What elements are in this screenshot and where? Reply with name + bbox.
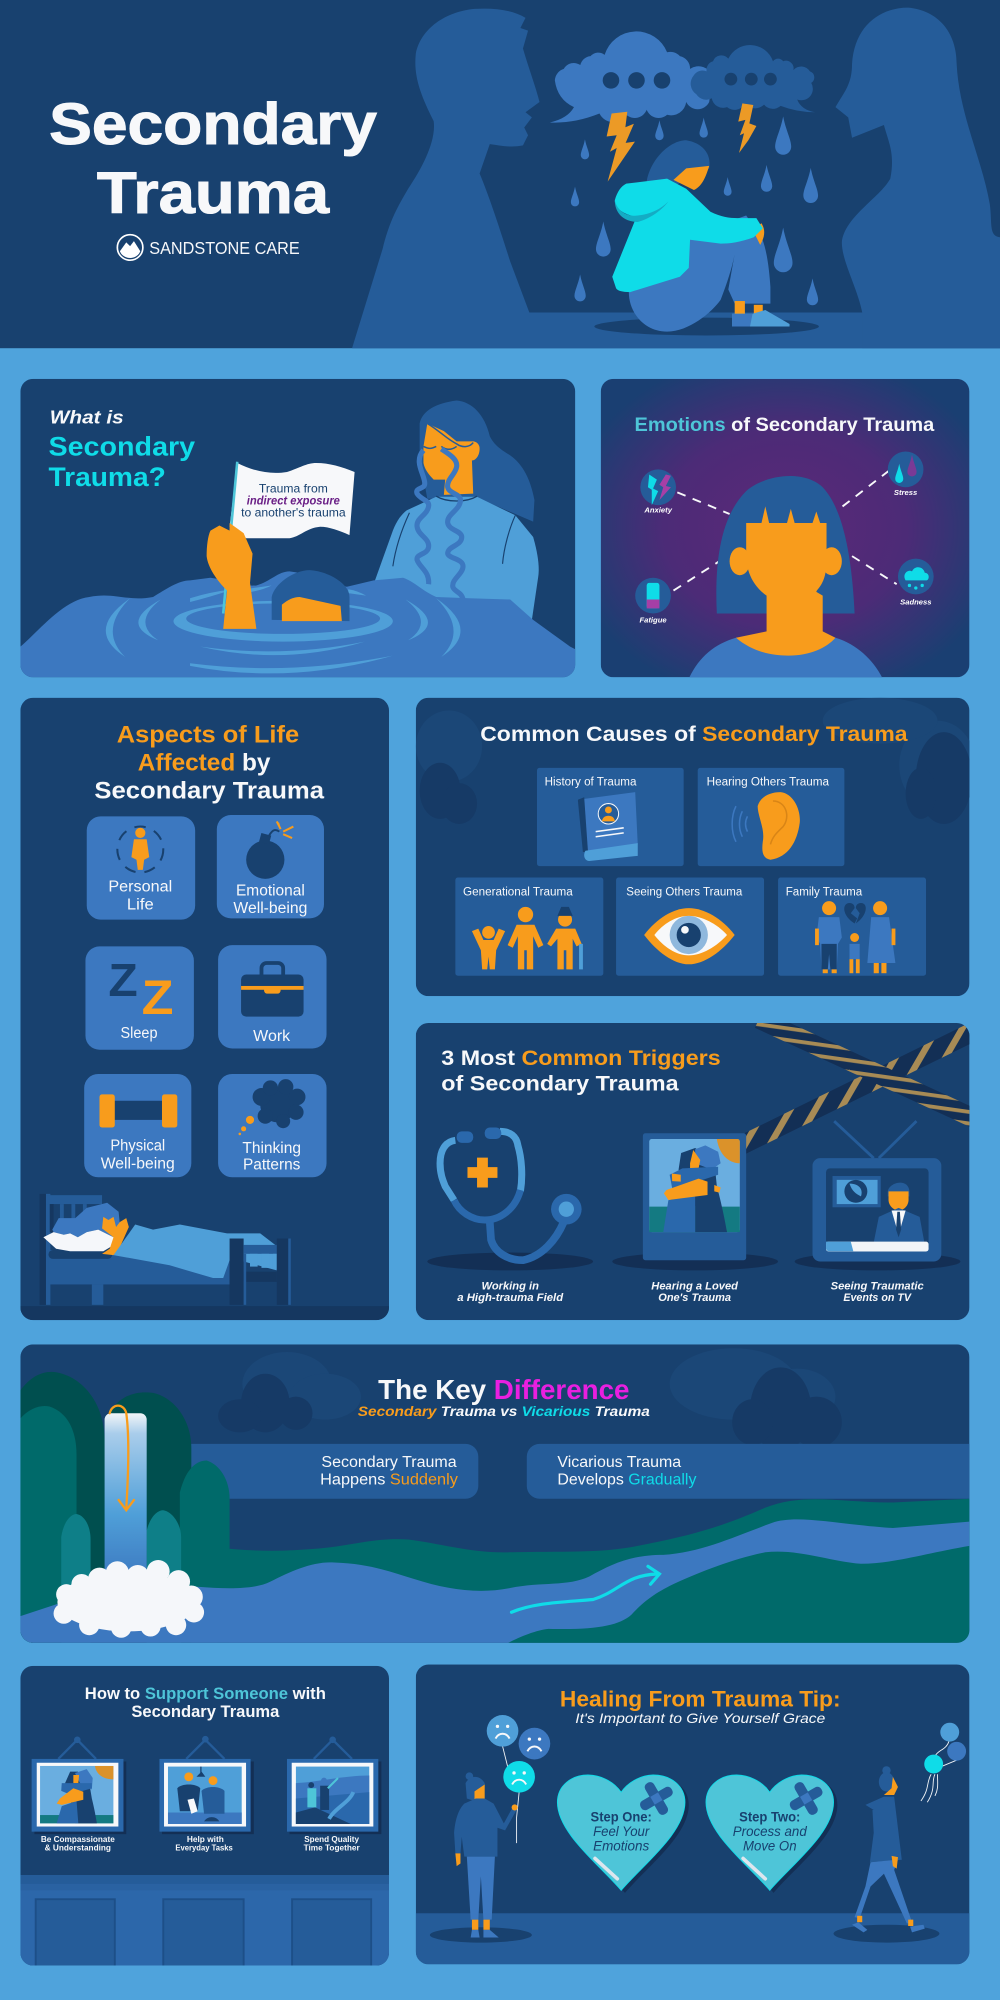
wall and doors (20, 1875, 389, 1976)
captions: a High-trauma Field (457, 1292, 564, 1304)
card: history of trauma: History of Trauma (545, 775, 637, 789)
stethoscope (427, 1128, 593, 1270)
arrow: sudden (110, 1406, 134, 1510)
tile: sleep: Sleep (121, 1025, 158, 1042)
panel: key difference (20, 1344, 969, 1645)
heading: Healing From Trauma Tip: (560, 1687, 841, 1712)
storm cloud small (691, 45, 815, 112)
card: hearing others trauma (698, 768, 844, 866)
sitting figure (594, 140, 819, 335)
card: seeing others trauma (616, 878, 764, 976)
sleeping figure in bed (20, 1194, 389, 1320)
heading (48, 410, 195, 486)
panel: healing tip (416, 1665, 969, 1964)
photo: hearing a loved one's trauma (612, 1133, 778, 1270)
head illustration (689, 476, 883, 679)
captions: Working in (482, 1281, 539, 1293)
heart: step one (557, 1774, 689, 1893)
caution tape (744, 1023, 970, 1154)
tile: physical well-being: Well-being (101, 1155, 175, 1172)
logo: Sandstone Care (117, 235, 300, 260)
card: family trauma (778, 878, 926, 976)
flag with definition (223, 462, 355, 614)
balloons: drifting away (921, 1723, 966, 1802)
tile: thinking patterns: Thinking (242, 1140, 301, 1157)
heading (94, 721, 325, 803)
heart: step one: Feel Your (593, 1823, 650, 1839)
band: secondary trauma happens suddenly: Secondary Trauma (321, 1454, 457, 1471)
heading: Secondary (48, 431, 195, 461)
tile: personal life (87, 816, 195, 920)
lightning bolts (607, 103, 756, 182)
captions: Time Together (304, 1843, 360, 1853)
heart: step two: Process and (733, 1823, 808, 1839)
tile: physical well-being (84, 1074, 191, 1177)
flag with definition: to another's trauma (241, 506, 346, 520)
icon: anxiety (640, 469, 676, 515)
tv news (795, 1121, 960, 1270)
title: Trauma (97, 161, 329, 226)
raised hand (207, 523, 256, 629)
logo: Sandstone Care: SANDSTONE CARE (149, 238, 300, 258)
water (20, 571, 575, 677)
heading: of Secondary Trauma (441, 1071, 680, 1096)
heart: step two (706, 1774, 837, 1893)
flag with definition: Trauma from (259, 481, 328, 495)
heading: Aspects of Life (117, 721, 299, 747)
tile: emotional well-being (217, 815, 324, 918)
tile: thinking patterns (218, 1074, 327, 1177)
heart: step two: Move On (743, 1838, 797, 1854)
figure: man walking away (834, 1766, 939, 1943)
heading: Secondary Trauma (131, 1702, 280, 1721)
panel: aspects of life (20, 698, 389, 1320)
band: vicarious trauma develops gradually: Vicarious Trauma (557, 1454, 681, 1471)
connector lines (673, 471, 897, 591)
panel: common causes (416, 698, 976, 996)
icon: sadness: Sadness (900, 598, 932, 607)
card: history of trauma (537, 768, 684, 866)
band: secondary trauma happens suddenly (179, 1444, 478, 1499)
trees (20, 1372, 230, 1645)
captions: Everyday Tasks (175, 1843, 233, 1853)
tile: work (218, 945, 327, 1048)
hero banner (0, 0, 1000, 348)
card: generational trauma (455, 878, 603, 976)
icon: stress (888, 452, 923, 497)
figure: woman with balloons (430, 1772, 532, 1943)
tile: work: Work (253, 1028, 291, 1045)
heart: step one: Emotions (593, 1838, 649, 1854)
tile: personal life: Life (127, 896, 154, 913)
title: Secondary (49, 92, 377, 157)
ripples (106, 585, 461, 673)
band: secondary trauma happens suddenly: Happens Suddenly (320, 1472, 458, 1489)
captions (41, 1834, 360, 1853)
tile: physical well-being: Physical (110, 1138, 165, 1155)
icon: fatigue (635, 578, 671, 624)
captions: Seeing Traumatic (831, 1281, 924, 1293)
heading: Trauma? (48, 462, 166, 492)
woman looking on (375, 401, 539, 620)
heading: Affected by (138, 749, 270, 775)
heading: Secondary Trauma vs Vicarious Trauma (358, 1404, 651, 1419)
captions: Hearing a Loved (651, 1281, 738, 1293)
icon: anxiety: Anxiety (643, 506, 673, 515)
tile: sleep: Z (108, 954, 138, 1006)
captions: Spend Quality (304, 1834, 359, 1844)
captions: & Understanding (45, 1843, 111, 1853)
heart: step two: Step Two: (739, 1808, 800, 1824)
icon: sadness (898, 559, 934, 607)
tile: emotional well-being: Emotional (236, 882, 305, 899)
heading (560, 1687, 841, 1726)
card: family trauma: Family Trauma (786, 884, 862, 898)
panel: emotions (601, 379, 969, 679)
tile: thinking patterns: Patterns (243, 1157, 301, 1174)
heart: step one: Step One: (591, 1808, 652, 1824)
card: hearing others trauma: Hearing Others Trauma (707, 775, 829, 789)
band: vicarious trauma develops gradually (527, 1444, 969, 1499)
silhouette: left speaker (352, 9, 1000, 348)
title (49, 92, 377, 226)
captions (457, 1281, 924, 1304)
captions: Help with (187, 1834, 224, 1844)
captions: Be Compassionate (41, 1834, 115, 1844)
arrow: gradual (511, 1566, 659, 1612)
panel: what is secondary trauma (20, 379, 575, 677)
heading: The Key Difference (378, 1374, 629, 1405)
card: generational trauma: Generational Trauma (463, 884, 573, 898)
river (20, 1519, 969, 1645)
tile: sleep (85, 946, 194, 1050)
heading: It's Important to Give Yourself Grace (575, 1710, 825, 1726)
captions: One's Trauma (658, 1292, 731, 1304)
heading: Secondary Trauma (94, 777, 325, 803)
riverbank (217, 1499, 969, 1643)
heading (442, 1050, 720, 1095)
heading (85, 1684, 326, 1721)
raindrops (571, 116, 818, 305)
heading: 3 Most Common Triggers (441, 1045, 721, 1070)
tile: emotional well-being: Well-being (233, 900, 307, 917)
frame: compassionate (32, 1736, 126, 1834)
storm cloud large (550, 31, 713, 123)
flag with definition: indirect exposure (247, 493, 340, 507)
heading (358, 1374, 651, 1419)
heading: What is (50, 406, 124, 427)
frame: quality time (287, 1736, 381, 1834)
waterfall (105, 1413, 147, 1582)
band: vicarious trauma develops gradually: Develops Gradually (557, 1472, 696, 1489)
frame: everyday tasks (159, 1736, 254, 1834)
tile: sleep: Z (142, 971, 173, 1025)
balloons: sad faces (487, 1715, 550, 1843)
card: seeing others trauma: Seeing Others Trauma (626, 884, 743, 898)
heading: How to Support Someone with (85, 1684, 326, 1703)
captions: Events on TV (843, 1292, 912, 1304)
panel: triggers (416, 1019, 989, 1320)
icon: fatigue: Fatigue (639, 615, 667, 624)
silhouette: right speaker (835, 8, 1000, 348)
submerged head (272, 570, 349, 621)
heading: Emotions of Secondary Trauma (635, 415, 935, 436)
panel: how to support (20, 1666, 389, 1976)
heading: Common Causes of Secondary Trauma (480, 721, 909, 746)
icon: stress: Stress (894, 488, 917, 497)
tile: personal life: Personal (108, 879, 172, 896)
spray cloud (54, 1560, 204, 1638)
